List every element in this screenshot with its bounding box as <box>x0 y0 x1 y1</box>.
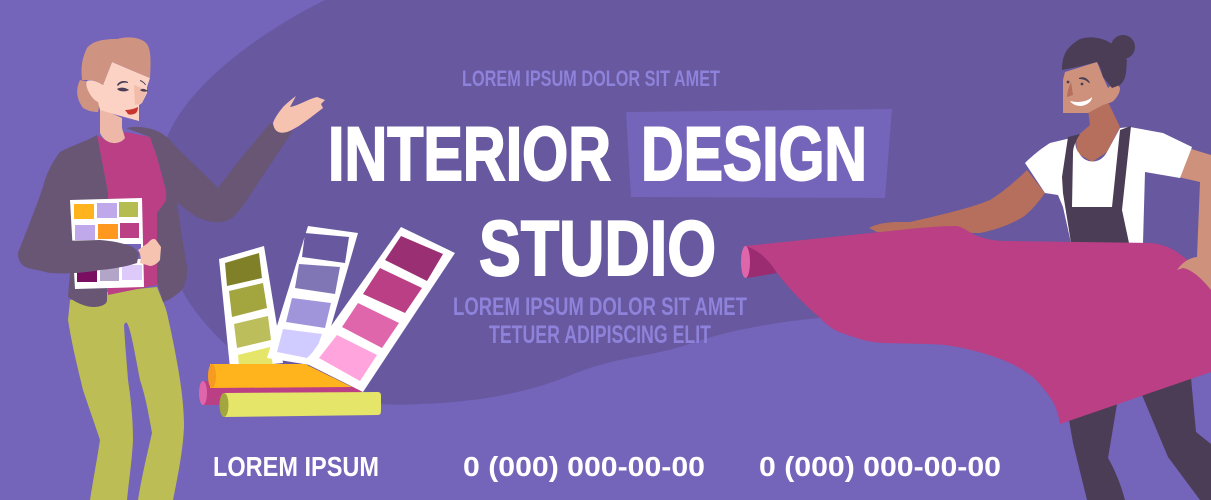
woman top <box>97 132 166 295</box>
man hand on fabric <box>1177 257 1211 290</box>
man neck <box>1076 102 1120 162</box>
man eyes <box>1067 77 1090 85</box>
card sheet <box>70 198 144 289</box>
orange roll <box>210 364 352 388</box>
rolls <box>199 364 381 417</box>
woman nose shadow <box>134 85 147 105</box>
fabric <box>741 226 1211 424</box>
right swatch strip <box>305 227 455 392</box>
man right arm <box>1178 147 1211 290</box>
woman jacket left <box>18 135 108 307</box>
woman eyes <box>117 80 148 92</box>
woman raised hand <box>273 96 325 133</box>
top tagline: LOREM IPSUM DOLOR SIT AMET <box>462 66 720 91</box>
phone number one: 0 (000) 000-00-00 <box>463 451 705 482</box>
man shirt <box>1025 127 1192 243</box>
woman forearm <box>18 240 139 273</box>
title line two: STUDIO <box>479 204 716 292</box>
phone number two: 0 (000) 000-00-00 <box>759 451 1001 482</box>
woman fist <box>138 239 161 266</box>
background blob <box>162 0 1211 405</box>
footer label: LOREM IPSUM <box>213 451 379 482</box>
magenta roll <box>203 381 362 405</box>
colour card <box>70 198 144 289</box>
woman pants <box>68 287 184 500</box>
fabric roll inside <box>745 246 777 278</box>
yellow roll <box>224 392 381 417</box>
man hair <box>1062 37 1127 88</box>
man left arm <box>869 170 1045 233</box>
woman jacket right and raised arm <box>126 123 292 302</box>
woman lips <box>125 107 138 115</box>
man face <box>1063 62 1120 113</box>
man nose <box>1067 82 1073 97</box>
man smile <box>1070 97 1092 106</box>
woman face <box>86 62 150 121</box>
man figure <box>741 35 1211 500</box>
title highlight box <box>626 109 892 198</box>
subtitle line one: LOREM IPSUM DOLOR SIT AMET <box>453 293 747 321</box>
middle swatch strip <box>267 226 358 365</box>
woman hair <box>82 37 151 85</box>
man overalls <box>1062 126 1131 243</box>
left swatch strip <box>219 246 283 368</box>
man legs <box>1069 378 1211 500</box>
woman hair bun <box>77 80 103 112</box>
woman neck <box>100 108 125 143</box>
woman figure <box>18 37 325 500</box>
swatch fan <box>199 226 455 417</box>
title line one: INTERIOR <box>328 112 611 197</box>
subtitle line two: TETUER ADIPISCING ELIT <box>489 321 711 349</box>
title highlighted word: DESIGN <box>641 112 867 197</box>
fabric sheet <box>745 226 1211 424</box>
man hair bun <box>1111 35 1135 59</box>
fabric roll end <box>741 246 750 278</box>
